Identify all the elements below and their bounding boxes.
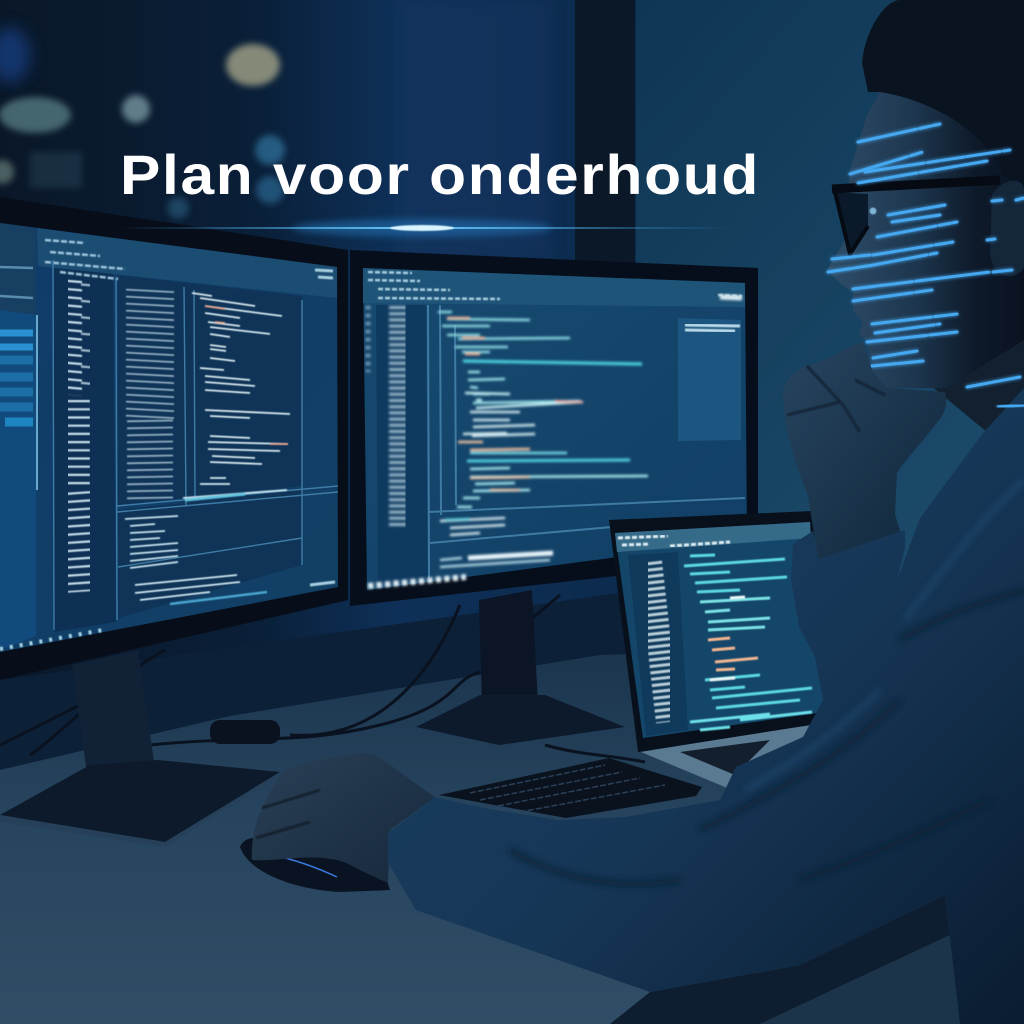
- person: ear: [990, 180, 1024, 276]
- sleeve folds: [510, 590, 1024, 884]
- left monitor: code lines: [0, 270, 335, 649]
- left monitor: toolbar: [37, 228, 337, 298]
- back wall below monitors: [0, 590, 640, 775]
- left monitor: toolbar text: [45, 240, 125, 279]
- hand on mouse: [252, 753, 435, 883]
- shirt collar code glow: [997, 405, 1024, 407]
- laptop: toolbar: [615, 522, 811, 552]
- cables on desk: [0, 595, 645, 762]
- hand at chin: [783, 342, 946, 559]
- left monitor: sidebar: [0, 223, 37, 650]
- left monitor: dark code panel: [118, 275, 302, 505]
- bokeh city lights: [0, 27, 285, 219]
- middle monitor: toolbar: [363, 268, 745, 307]
- middle monitor: toolbar text: [368, 272, 742, 299]
- left monitor stand: [0, 650, 280, 847]
- left monitor: panel dividers: [53, 260, 338, 630]
- laptop: file tree panel: [628, 552, 688, 736]
- hand finger lines: [787, 366, 885, 432]
- person: neck: [930, 300, 1024, 432]
- background: night window: [0, 0, 1024, 720]
- middle monitor: file tree: [368, 306, 402, 528]
- projected code on face: [828, 124, 1024, 387]
- desk surface: [0, 640, 1024, 1024]
- middle monitor stand: [416, 590, 625, 745]
- keyboard: [439, 758, 702, 818]
- lower right floor: [760, 935, 965, 1024]
- middle monitor: code lines: [368, 297, 742, 586]
- glasses: [832, 180, 1000, 255]
- title underline glow: [120, 219, 732, 237]
- mouse: [240, 838, 390, 892]
- left monitor: bottom panel: [118, 490, 302, 618]
- middle monitor: panel dividers: [428, 305, 745, 578]
- person: face: [827, 92, 1024, 388]
- person: hair: [862, 0, 1024, 190]
- left monitor: dark tree panel: [54, 268, 116, 632]
- middle monitor: [350, 250, 758, 606]
- laptop: toolbar text: [618, 536, 730, 546]
- sleeve highlight: [745, 480, 1024, 790]
- middle monitor: outline panel: [678, 318, 741, 441]
- left monitor: file tree: [70, 280, 88, 592]
- shadow below arm: [610, 895, 950, 1024]
- middle monitor: file tree panel: [376, 305, 428, 585]
- finger lines: [256, 790, 320, 838]
- laptop: [609, 511, 830, 790]
- left monitor: [0, 197, 348, 680]
- person: shirt and arm: [388, 388, 1024, 1024]
- laptop: code lines: [684, 555, 812, 730]
- laptop: file tree: [650, 562, 668, 722]
- title: Plan voor onderhoud: [120, 144, 758, 206]
